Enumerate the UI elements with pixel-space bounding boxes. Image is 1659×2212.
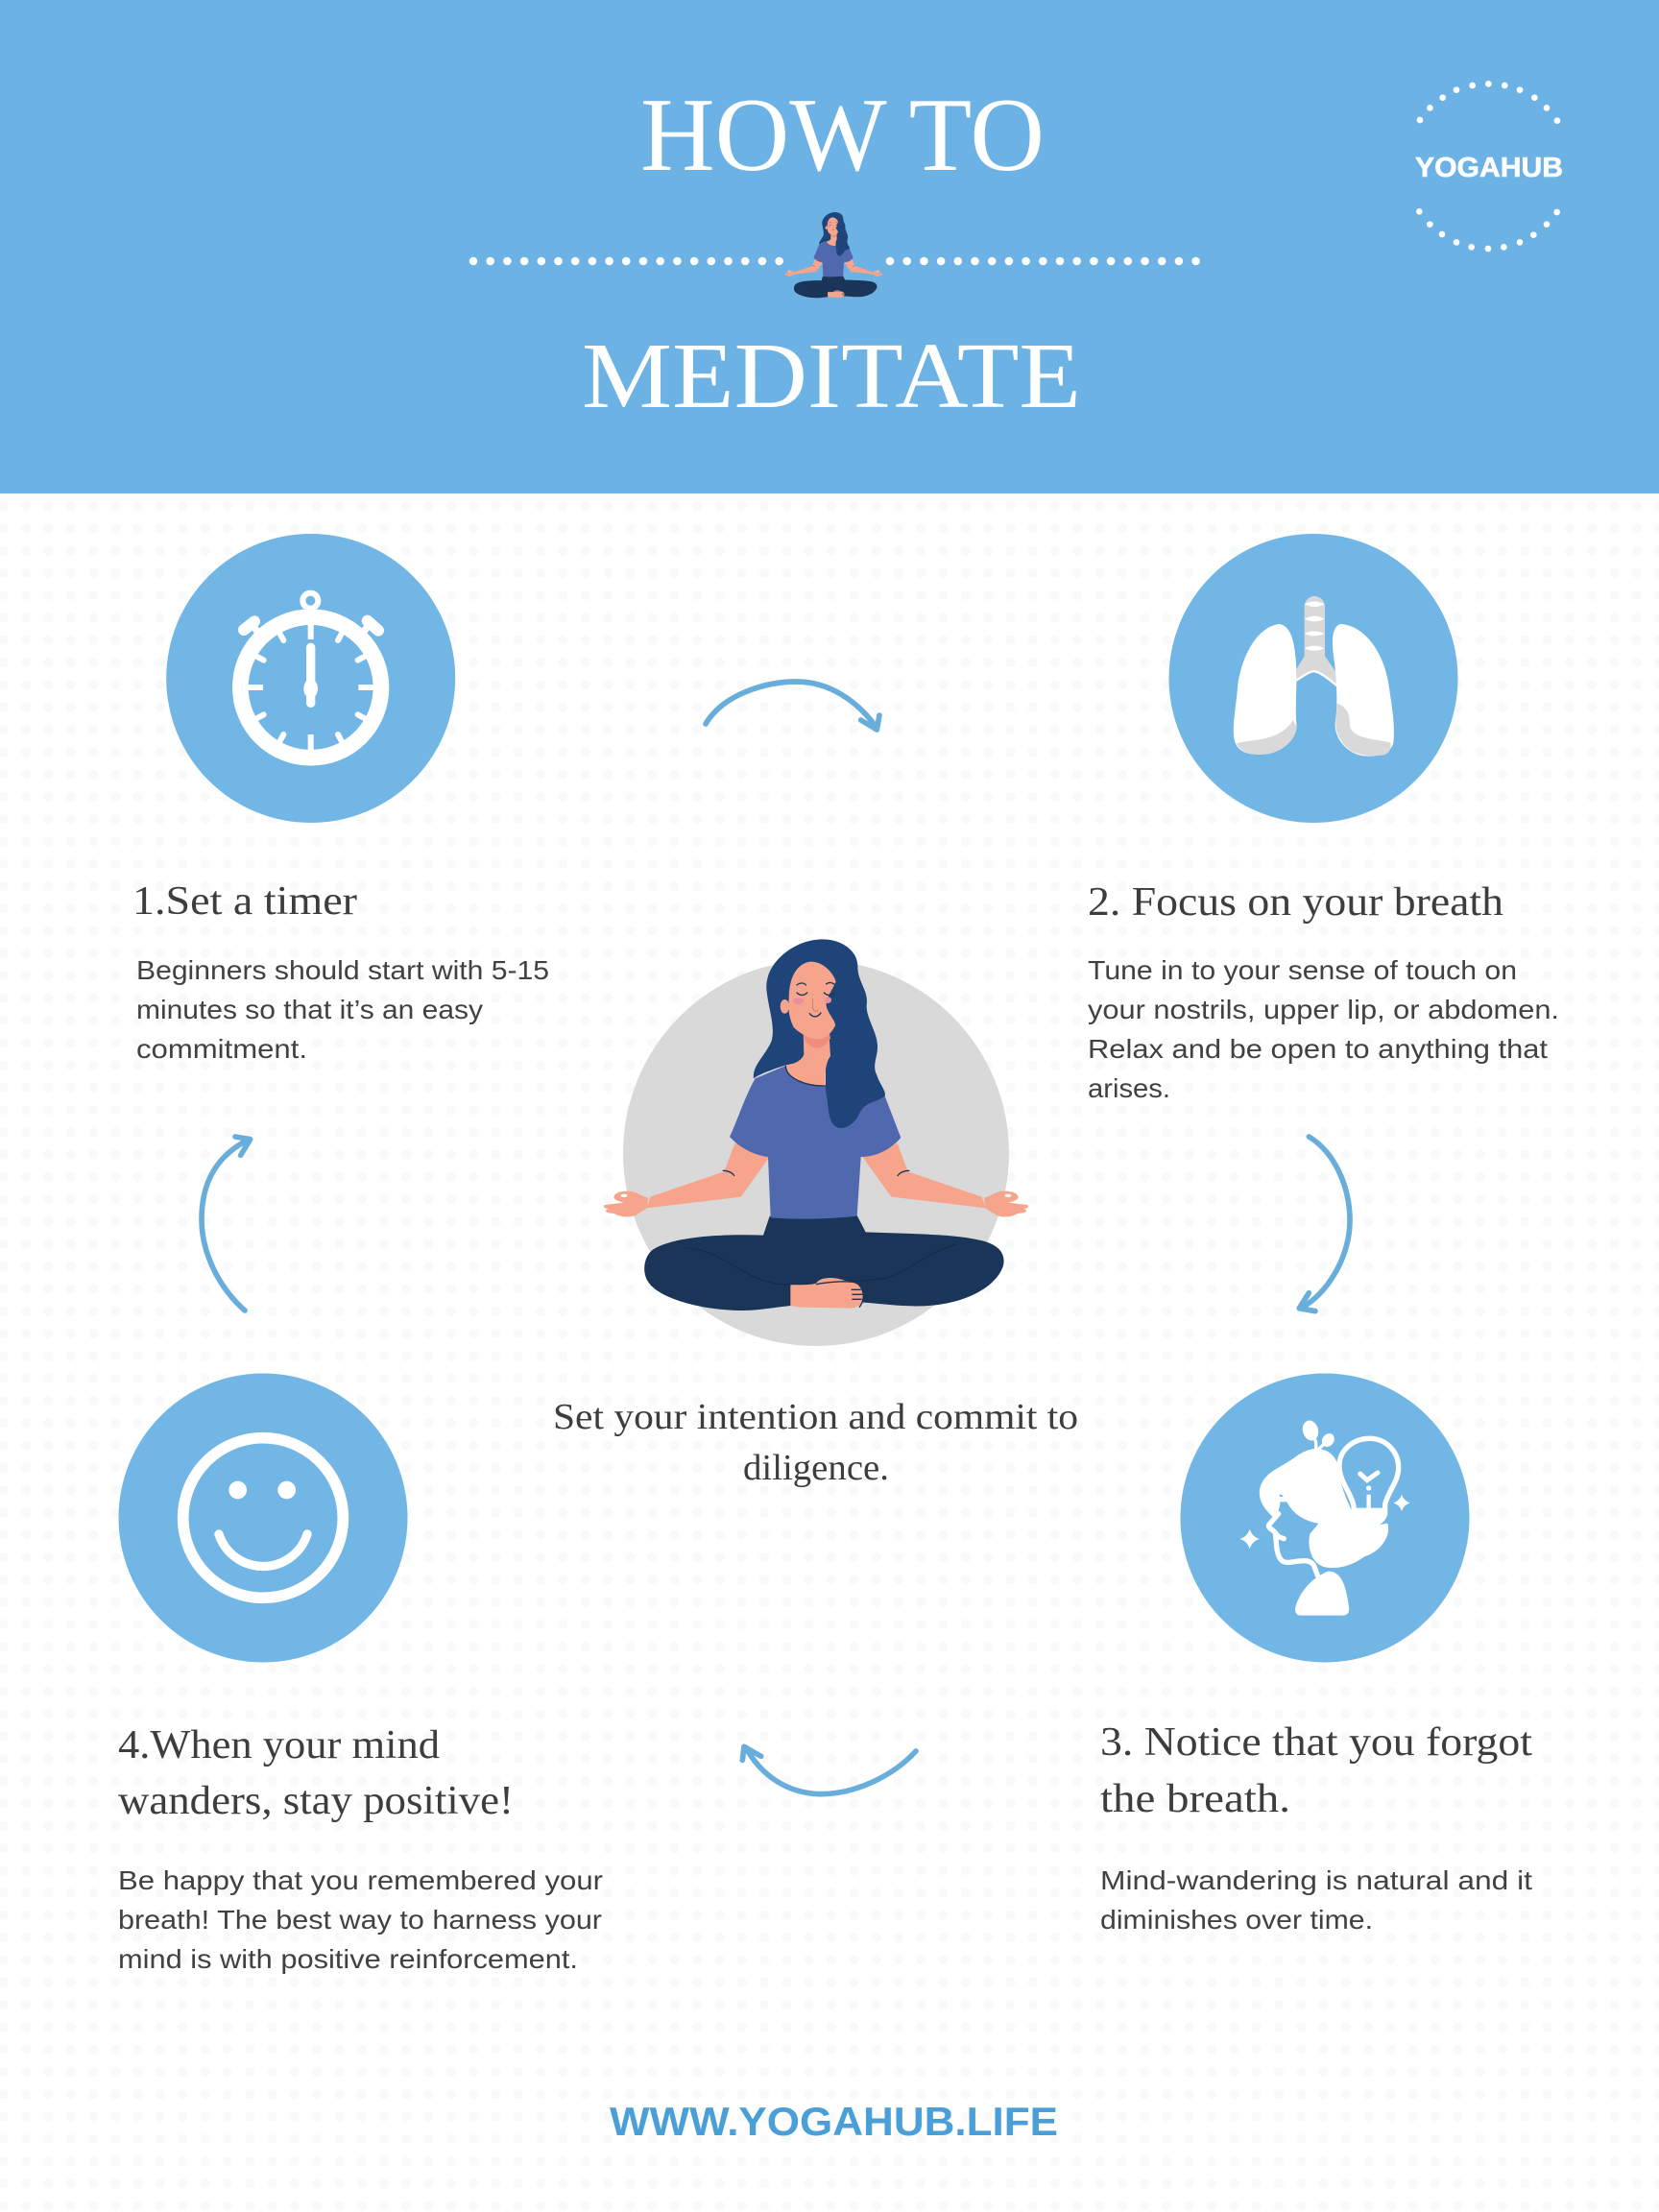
illustration: grey circle backdrop	[623, 960, 1009, 1346]
footer url: WWW.YOGAHUB.LIFE	[610, 2099, 1058, 2144]
heading: step 1: 1.Set a timer	[132, 879, 357, 924]
heading: step 2: 2. Focus on your breath	[1088, 880, 1503, 925]
icon: head with lightbulb	[1181, 1373, 1469, 1663]
illustration: meditating woman	[604, 939, 1028, 1310]
text: step 1 body	[136, 955, 549, 1064]
header band	[0, 0, 1659, 493]
arrow: positive to timer	[202, 1137, 251, 1310]
text: step 4 body: Be happy that you remembered your	[118, 1865, 603, 1895]
dotted divider left	[469, 257, 783, 265]
icon: smiley	[119, 1373, 407, 1663]
title: how to: HOW TO	[640, 77, 1045, 193]
text: step 2 body: Tune in to your sense of touch on	[1088, 955, 1517, 985]
heading: step 4: 4.When your mind	[118, 1723, 440, 1767]
text: central intention: Set your intention and commit to	[553, 1397, 1078, 1437]
text: step 2 body: your nostrils, upper lip, or abdomen.	[1088, 995, 1559, 1024]
text: step 3 body: diminishes over time.	[1100, 1905, 1373, 1935]
text: step 4 body: mind is with positive reinforcement.	[118, 1944, 578, 1974]
text: step 2 body	[1088, 955, 1559, 1103]
text: step 4 body	[118, 1865, 603, 1974]
text: step 1 body: commitment.	[136, 1034, 307, 1064]
logo: yogahub: YOGAHUB	[1415, 153, 1563, 183]
text: central intention: diligence.	[743, 1448, 889, 1488]
heading: step 3: 3. Notice that you forgot	[1100, 1720, 1532, 1765]
icon: stopwatch	[166, 534, 455, 823]
icon: lungs	[1169, 534, 1457, 823]
heading: step 4	[118, 1723, 514, 1823]
heading: step 3: the breath.	[1100, 1777, 1290, 1821]
title: meditate: MEDITATE	[582, 325, 1081, 427]
heading: step 3	[1100, 1720, 1532, 1821]
arrow: notice to positive	[742, 1746, 916, 1794]
text: step 3 body	[1100, 1865, 1532, 1935]
arrow: breath to notice	[1299, 1137, 1350, 1311]
text: step 1 body: Beginners should start with 5-15	[136, 955, 549, 985]
heading: step 4: wanders, stay positive!	[118, 1779, 514, 1823]
icon: small meditating woman	[784, 212, 882, 298]
text: step 4 body: breath! The best way to harness your	[118, 1905, 602, 1935]
dotted divider right	[886, 257, 1200, 265]
logo: yogahub	[1415, 81, 1563, 252]
arrow: timer to breath	[706, 682, 879, 730]
text: central intention	[553, 1397, 1078, 1488]
text: step 1 body: minutes so that it’s an easy	[136, 995, 483, 1024]
text: step 3 body: Mind-wandering is natural and it	[1100, 1865, 1532, 1895]
text: step 2 body: arises.	[1088, 1073, 1170, 1103]
text: step 2 body: Relax and be open to anything that	[1088, 1034, 1548, 1064]
